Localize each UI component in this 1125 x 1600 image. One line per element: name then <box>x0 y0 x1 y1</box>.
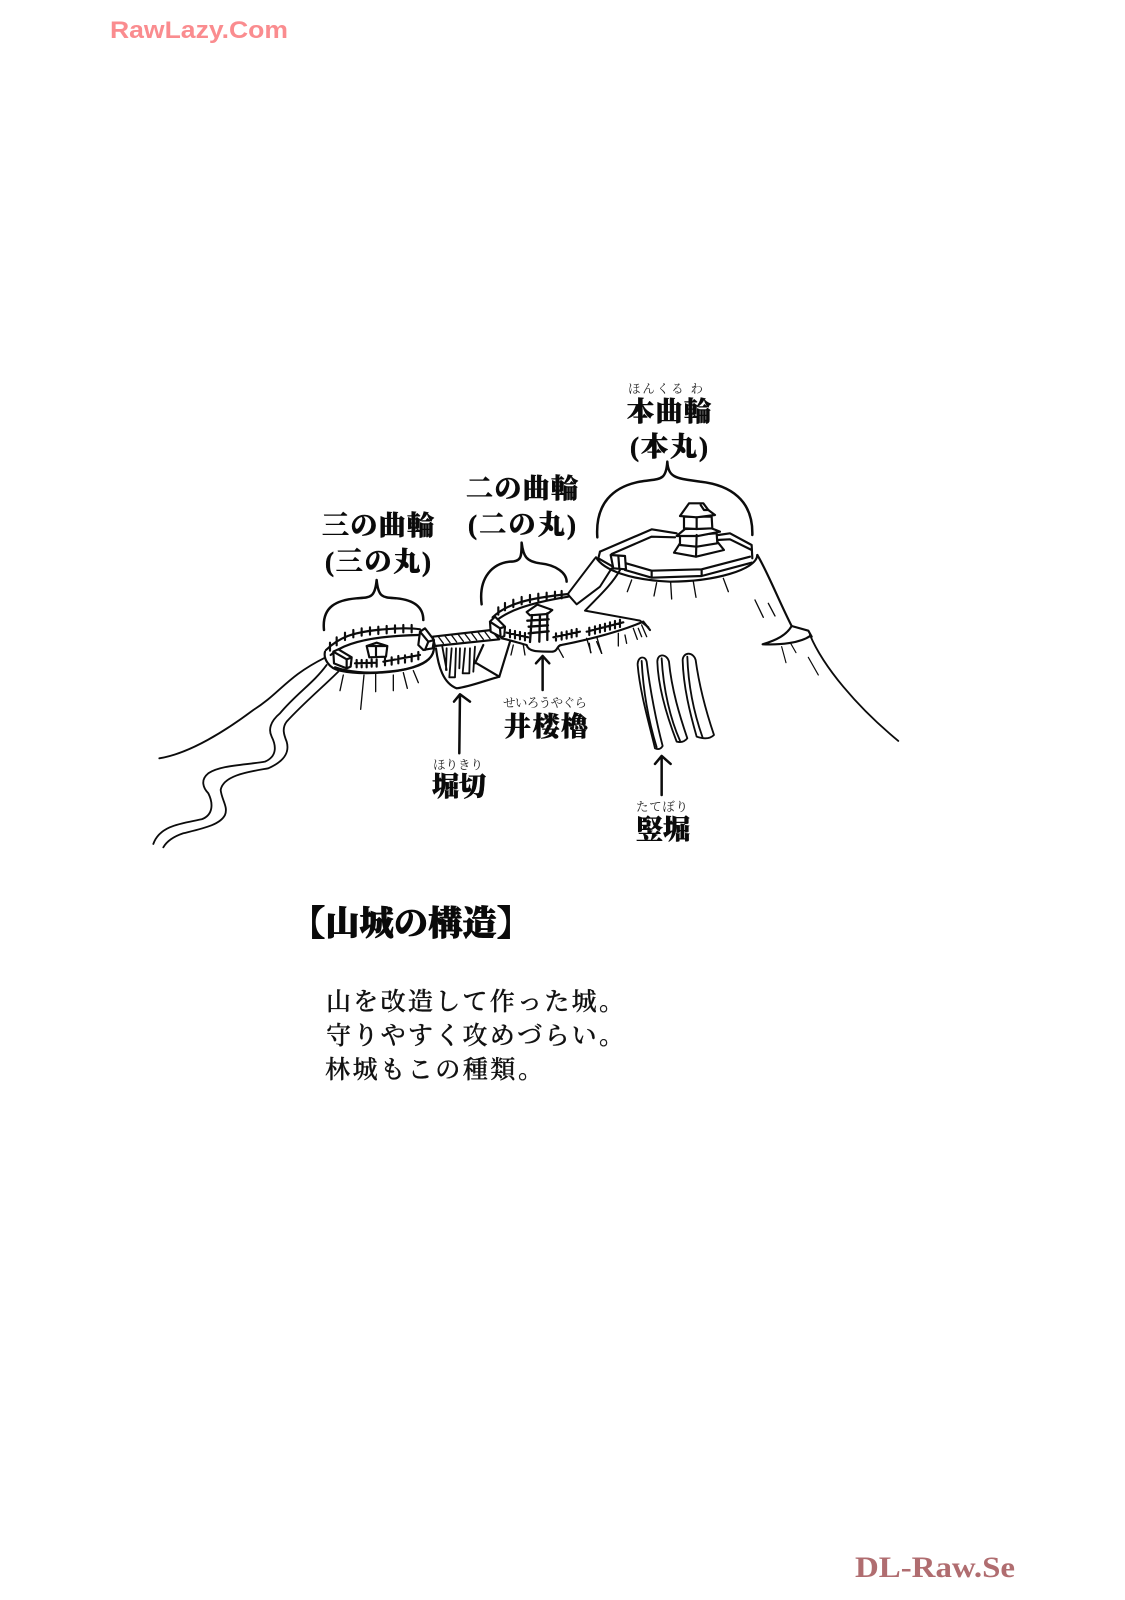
wall corner box <box>490 617 505 637</box>
label: seirou yagura reading: せいろうやぐら <box>503 696 587 710</box>
bracket: san-no-kuruwa <box>324 580 423 630</box>
arrow: to tatebori <box>655 756 671 795</box>
label: tatebori reading: たてぼり <box>636 800 688 814</box>
arrow: to horikiri <box>454 694 470 753</box>
label: hon-kuruwa reading: ほんくる わ <box>628 382 703 396</box>
arrow: to seirou yagura <box>536 656 549 690</box>
approach slope to main enclosure <box>568 558 648 653</box>
lower right slope <box>782 635 898 741</box>
tatebori: three vertical trenches <box>638 654 714 749</box>
seirou yagura tower <box>527 605 552 615</box>
watermark: DL-Raw.Se: DL-Raw.Se <box>855 1551 1015 1584</box>
second enclosure: ni-no-kuruwa <box>490 591 650 657</box>
label: hon-kuruwa: 本曲輪 <box>627 397 711 427</box>
left slope and winding road <box>153 658 338 847</box>
label: horikiri reading: ほりきり <box>433 758 483 772</box>
bracket: ni-no-kuruwa <box>481 543 567 604</box>
corner tower right <box>418 628 434 650</box>
bracket: hon-kuruwa <box>597 462 752 537</box>
castle keep <box>674 503 724 557</box>
heading: 【山城の構造】 <box>291 905 531 943</box>
label: ni-no-kuruwa: 二の曲輪 <box>466 474 578 504</box>
label: san-no-kuruwa: 三の曲輪 <box>322 511 434 541</box>
right mountain slope <box>757 555 792 626</box>
small house <box>367 643 387 657</box>
main enclosure: honmaru wall <box>596 503 812 644</box>
label: tatebori: 竪堀 <box>636 815 690 845</box>
explanatory text <box>325 988 624 1084</box>
explanatory text: 山を改造して作った城。 <box>326 988 624 1016</box>
label: ni-no-maru: (二の丸) <box>468 510 576 540</box>
label: horikiri: 堀切 <box>432 772 486 802</box>
watermark: RawLazy.Com: RawLazy.Com <box>110 17 288 44</box>
bridge and moat cut: horikiri <box>433 630 510 688</box>
label: san-no-maru: (三の丸) <box>325 547 431 577</box>
third enclosure: san-no-kuruwa <box>325 625 434 709</box>
label: honmaru: (本丸) <box>630 432 708 462</box>
corner tower left <box>333 649 352 668</box>
label: seirou yagura: 井楼櫓 <box>504 711 590 742</box>
explanatory text: 守りやすく攻めづらい。 <box>326 1022 624 1050</box>
explanatory text: 林城もこの種類。 <box>325 1056 543 1084</box>
mountain castle diagram <box>153 462 898 847</box>
